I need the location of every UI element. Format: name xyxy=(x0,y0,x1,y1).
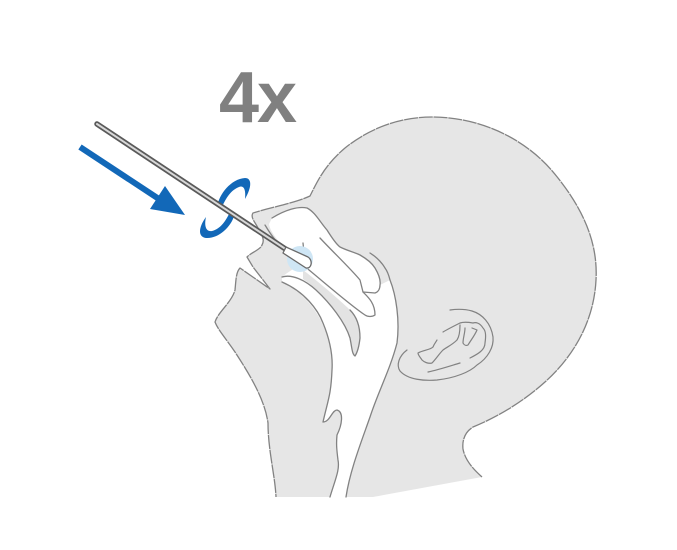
direction arrow xyxy=(80,147,185,215)
internal anatomy lines xyxy=(265,207,398,497)
swab xyxy=(97,124,311,268)
repetition count: 4x xyxy=(219,58,297,138)
rotation arrow xyxy=(200,178,250,238)
palate sliver xyxy=(303,270,360,356)
head fill xyxy=(215,117,596,497)
swab contact highlight xyxy=(287,246,313,272)
ear xyxy=(398,309,493,380)
nasal cavity and throat passage xyxy=(269,207,398,497)
head outline xyxy=(215,117,596,497)
